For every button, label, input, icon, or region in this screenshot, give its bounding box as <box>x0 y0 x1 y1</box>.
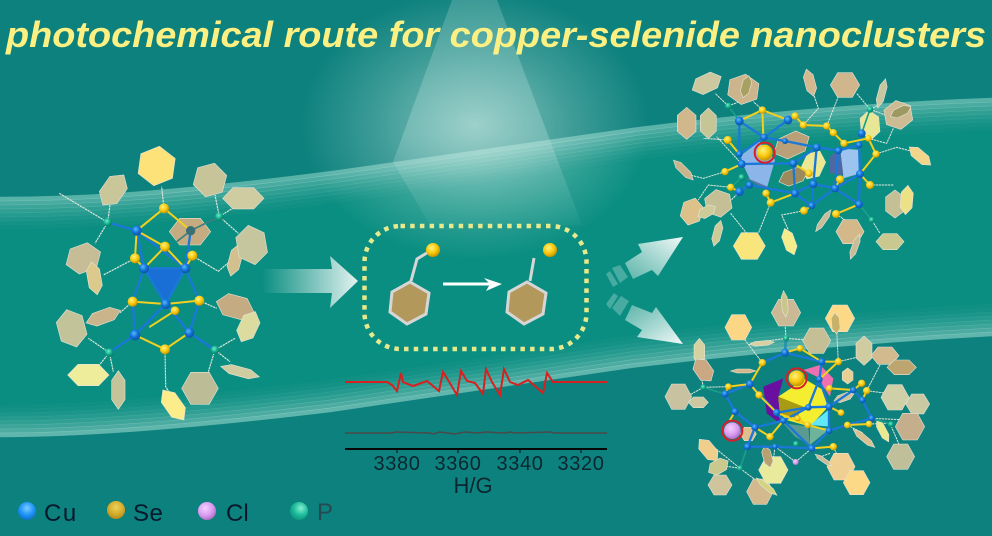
copper atoms <box>721 349 875 452</box>
blue polyhedra <box>739 142 860 190</box>
red EPR trace <box>345 369 607 395</box>
legend: phosphorus: P <box>317 499 333 526</box>
ligand phenyl rings <box>665 290 930 504</box>
highlighted selenium atom <box>755 143 775 163</box>
axis tick labels: 3320 <box>558 453 604 475</box>
cluster: lower product <box>665 290 930 504</box>
x axis <box>345 449 607 453</box>
benzyl selenide molecule <box>390 243 440 324</box>
axis tick labels: 3380 <box>374 453 420 475</box>
lower light wave <box>0 306 992 435</box>
selenium atoms <box>128 203 204 354</box>
blue copper triangle <box>144 268 185 304</box>
highlighted selenium atom <box>787 368 807 388</box>
arrow: cluster to photochemical step <box>262 256 358 308</box>
copper atoms <box>735 116 866 209</box>
selenium atoms <box>725 345 872 450</box>
axis title: H/G <box>453 473 493 498</box>
ligand bonds <box>59 187 238 393</box>
legend: phosphorus <box>290 499 333 526</box>
title: photochemical route for copper-selenide nanoclusters <box>5 14 986 55</box>
core bonds <box>725 106 876 220</box>
reaction arrow <box>443 278 502 291</box>
coloured polyhedra <box>763 365 833 445</box>
arrow: lower product <box>606 293 683 344</box>
grey EPR trace <box>345 432 607 434</box>
phosphorus atoms <box>700 335 894 471</box>
ligand bonds <box>687 323 910 483</box>
highlighted chlorine atom <box>722 421 742 441</box>
core bonds <box>703 338 891 468</box>
selenium atoms <box>721 106 880 218</box>
spotlight beam <box>393 0 582 225</box>
phosphorus atoms <box>725 103 875 223</box>
copper atoms <box>130 226 194 340</box>
cluster: upper product <box>671 68 934 260</box>
ligand phenyl rings <box>671 68 934 260</box>
core bonds <box>108 208 219 353</box>
cluster: starting copper-selenide nanocluster <box>54 144 269 425</box>
EPR spectrum chart <box>345 369 607 498</box>
axis tick labels: 3340 <box>497 453 543 475</box>
lower arrow stripes <box>606 293 629 316</box>
legend: chlorine <box>198 500 249 527</box>
legend: selenium <box>107 500 163 527</box>
reaction scheme <box>390 243 557 324</box>
upper arrow stripes <box>606 265 628 287</box>
legend <box>18 499 333 527</box>
legend: selenium: Se <box>133 500 163 527</box>
legend: chlorine: Cl <box>226 500 249 527</box>
upper light wave <box>0 100 992 227</box>
ligand bonds <box>690 93 913 233</box>
ligand phenyl rings <box>54 144 269 425</box>
legend: copper <box>18 500 78 527</box>
dotted reaction box <box>364 226 586 349</box>
legend: copper: Cu <box>44 500 78 527</box>
benzyl radical and selenium <box>507 243 557 324</box>
axis tick labels <box>374 453 604 475</box>
arrow: upper product <box>606 237 683 287</box>
phosphorus atoms <box>103 212 224 357</box>
axis tick labels: 3360 <box>435 453 481 475</box>
small chlorine atom <box>793 459 799 465</box>
spotlight glow <box>300 0 650 260</box>
greener zone between waves <box>0 98 992 437</box>
